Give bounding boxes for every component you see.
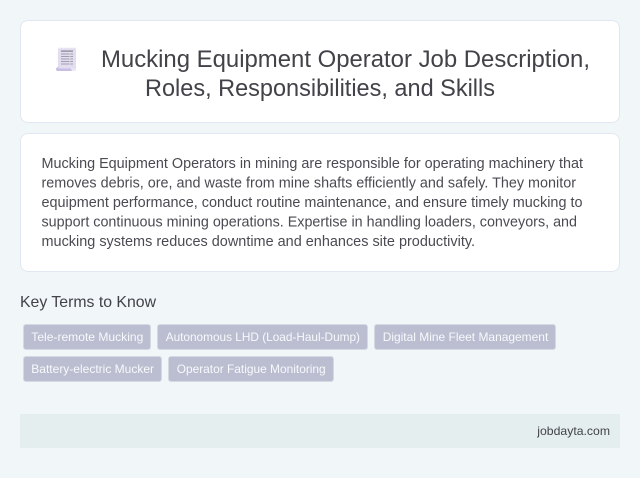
description text: removes debris, ore, and waste from mine shafts efficiently and safely. They monitor: [42, 174, 576, 192]
description text: Mucking Equipment Operators in mining are responsible for operating machinery that: [42, 155, 584, 172]
chip: tele-remote mucking: Tele-remote Mucking: [31, 330, 143, 344]
chip: tele-remote mucking: [24, 324, 150, 350]
chip: battery-electric mucker: Battery-electric Mucker: [31, 362, 154, 376]
description text: [42, 155, 584, 250]
title: [101, 46, 590, 102]
chip: battery-electric mucker: [24, 356, 162, 382]
chip: autonomous LHD: [158, 324, 368, 350]
description text: support continuous mining operations. Expertise in handling loaders, conveyors, and: [42, 214, 577, 230]
description text: equipment performance, conduct routine maintenance, and ensure timely mucking to: [42, 194, 582, 211]
chip: operator fatigue monitoring: Operator Fatigue Monitoring: [177, 362, 326, 376]
chips: key terms: [24, 324, 556, 382]
heading: key terms: Key Terms to Know: [20, 294, 156, 311]
panel: description card: [20, 134, 620, 272]
footer bar: [20, 414, 620, 448]
panel: title card: [20, 20, 620, 122]
chip: operator fatigue monitoring: [168, 356, 334, 382]
chip: digital mine fleet management: Digital Mine Fleet Management: [383, 330, 549, 344]
title: Mucking Equipment Operator Job Description,: [101, 46, 590, 73]
title: Roles, Responsibilities, and Skills: [145, 75, 495, 102]
footer source text: jobdayta.com: [536, 424, 610, 438]
chip: digital mine fleet management: [374, 324, 556, 350]
description text: mucking systems reduces downtime and enhances site productivity.: [42, 233, 475, 250]
chip: autonomous LHD: Autonomous LHD (Load-Haul-Dump): [166, 330, 360, 344]
icon: paper scroll document: [56, 48, 76, 71]
